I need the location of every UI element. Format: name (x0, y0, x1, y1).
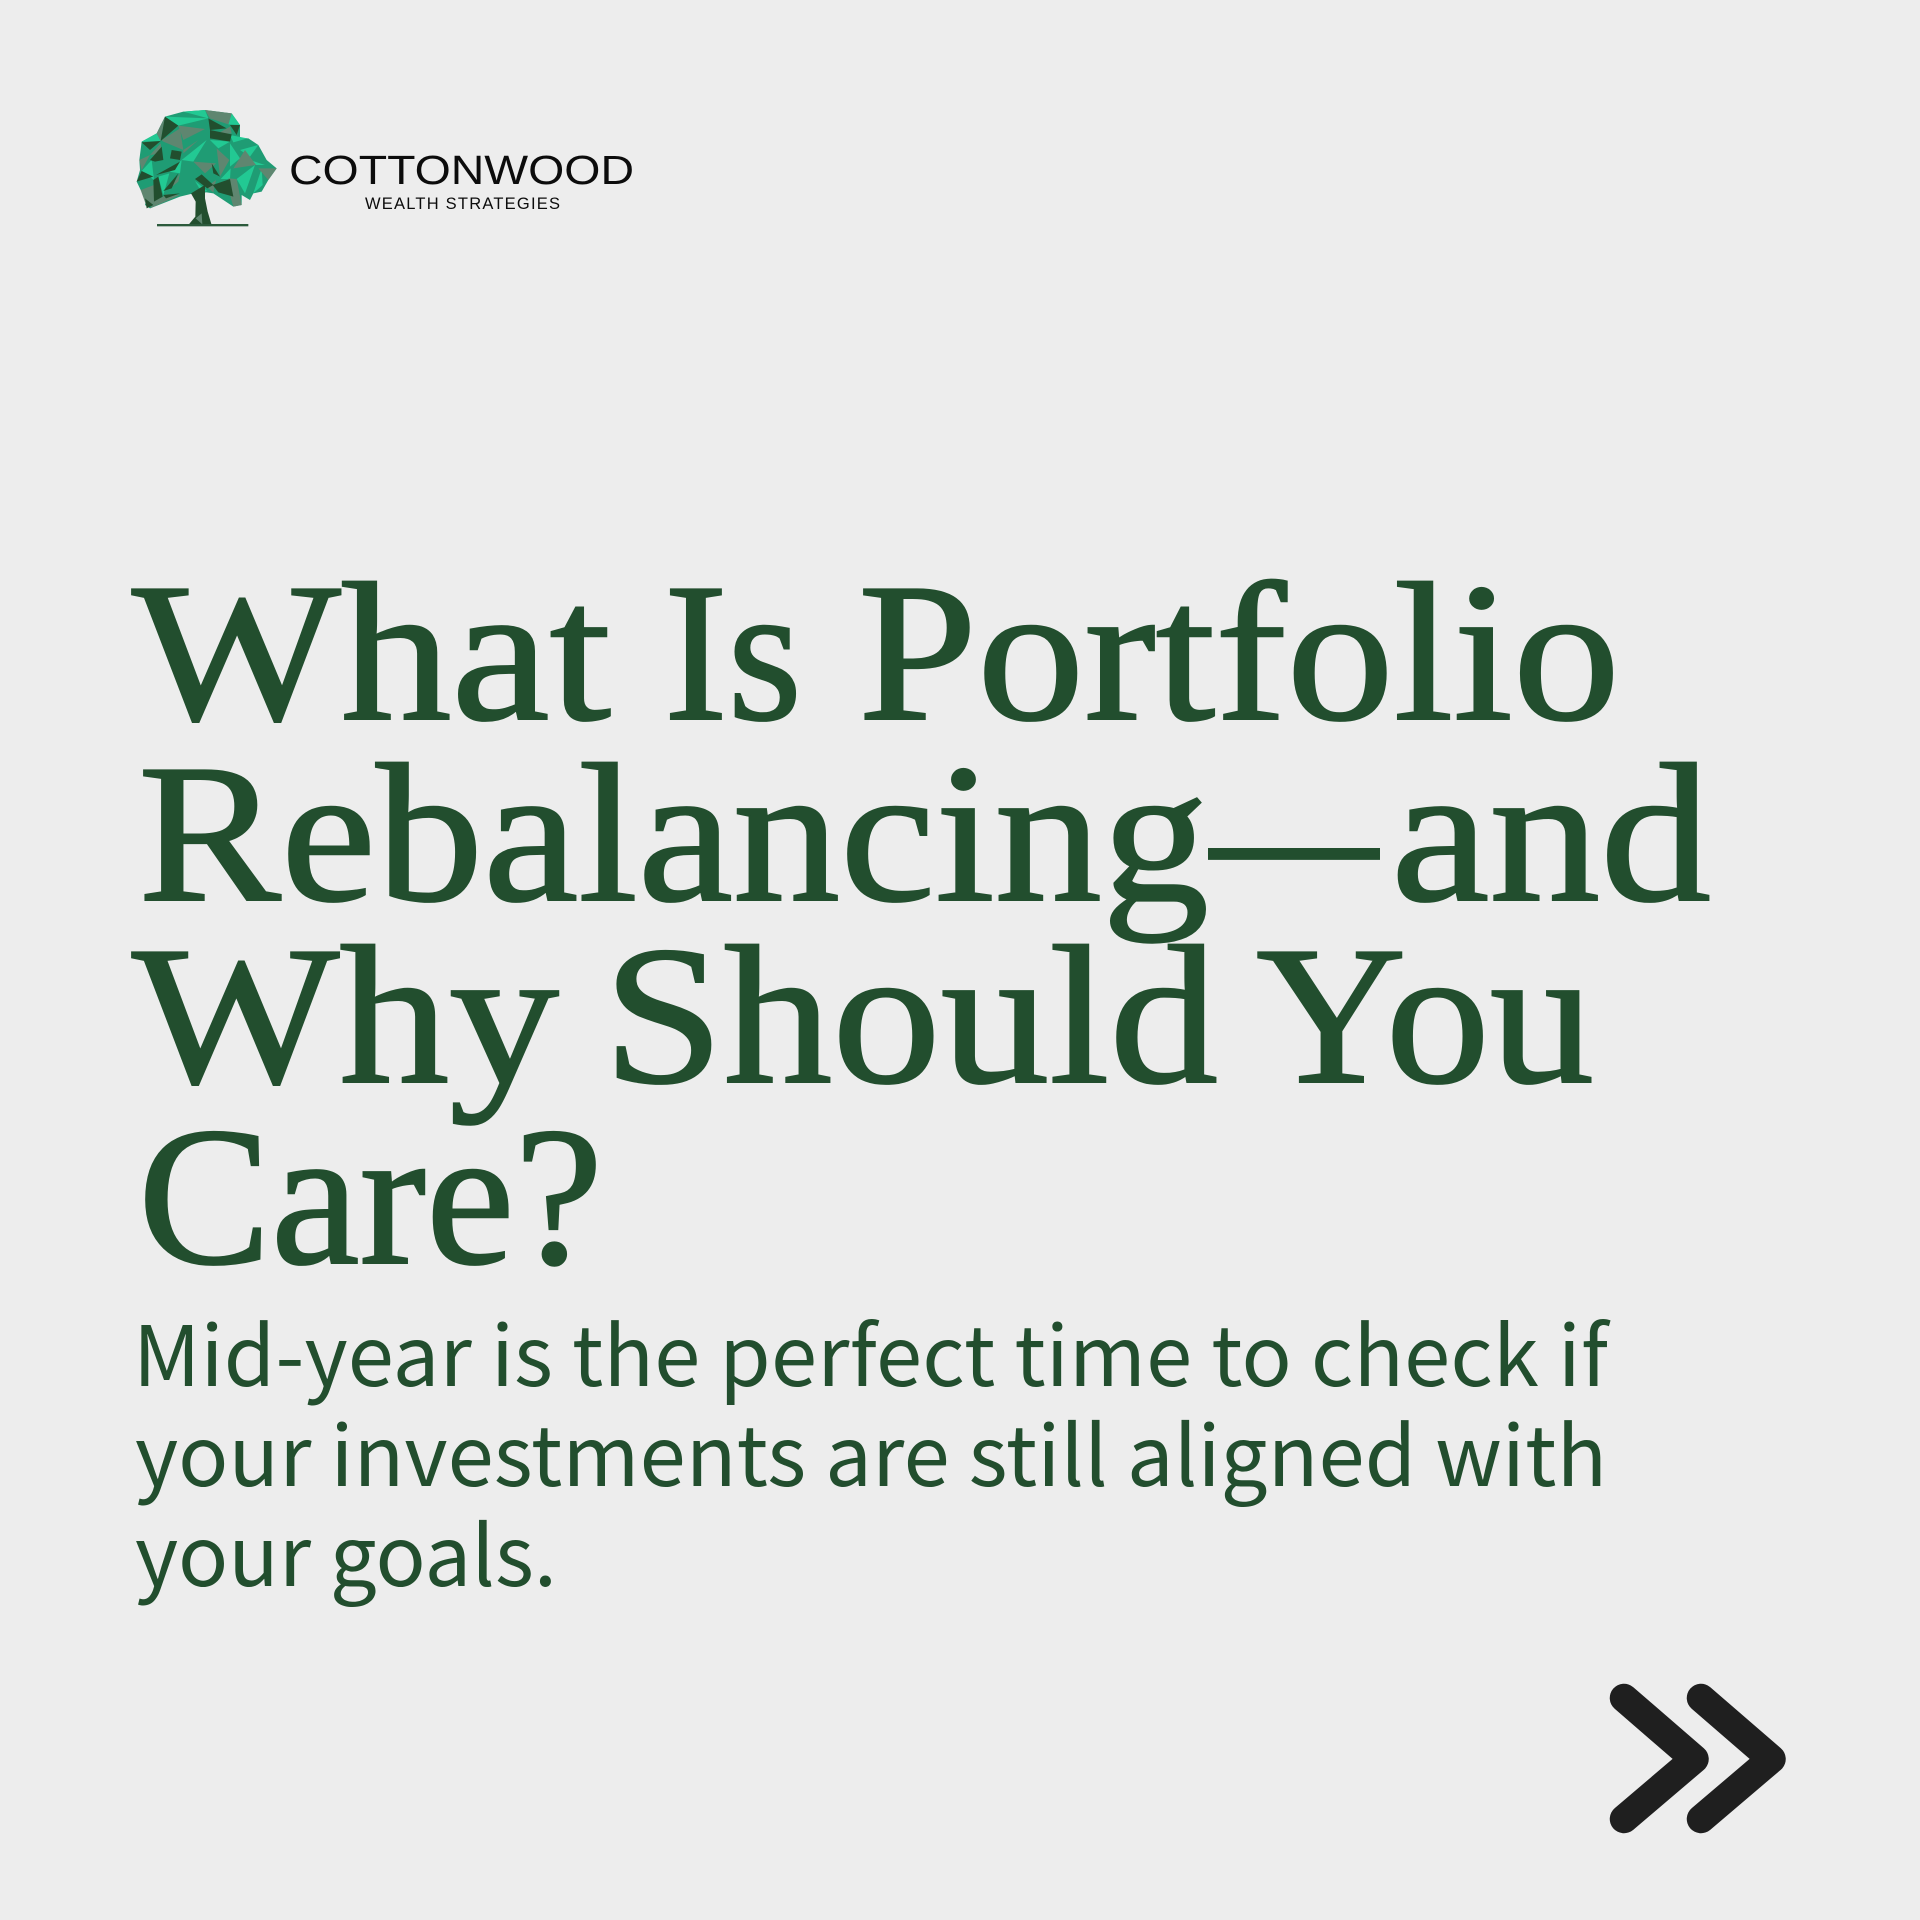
subtitle (133, 1290, 1611, 1610)
icon: polygon tree (137, 110, 277, 226)
title line 3: Should (603, 906, 1218, 1125)
title line 1: Portfolio (858, 543, 1620, 762)
title line 3: Why (132, 906, 559, 1125)
subtitle line 2: your investments are still aligned with (135, 1390, 1607, 1510)
title line 2: — (1208, 724, 1380, 943)
title line 2: and (1391, 724, 1711, 943)
title line 4: Care? (138, 1087, 603, 1306)
subtitle line 3: your goals. (135, 1490, 557, 1610)
title line 2: Rebalancing (138, 724, 1209, 943)
title (132, 543, 1711, 1306)
title line 1: What (132, 543, 611, 762)
title line 3: You (1256, 906, 1594, 1125)
logo tagline: WEALTH STRATEGIES (365, 195, 560, 213)
title line 3 (132, 906, 1594, 1125)
title line 1: Is (664, 543, 802, 762)
logo wordmark: COTTONWOOD (289, 147, 634, 193)
subtitle line 1: Mid-year is the perfect time to check if (133, 1290, 1611, 1410)
title line 2 (138, 724, 1711, 943)
icon: double chevron arrow (1624, 1698, 1772, 1819)
title line 1 (132, 543, 1620, 762)
logo (137, 110, 634, 226)
